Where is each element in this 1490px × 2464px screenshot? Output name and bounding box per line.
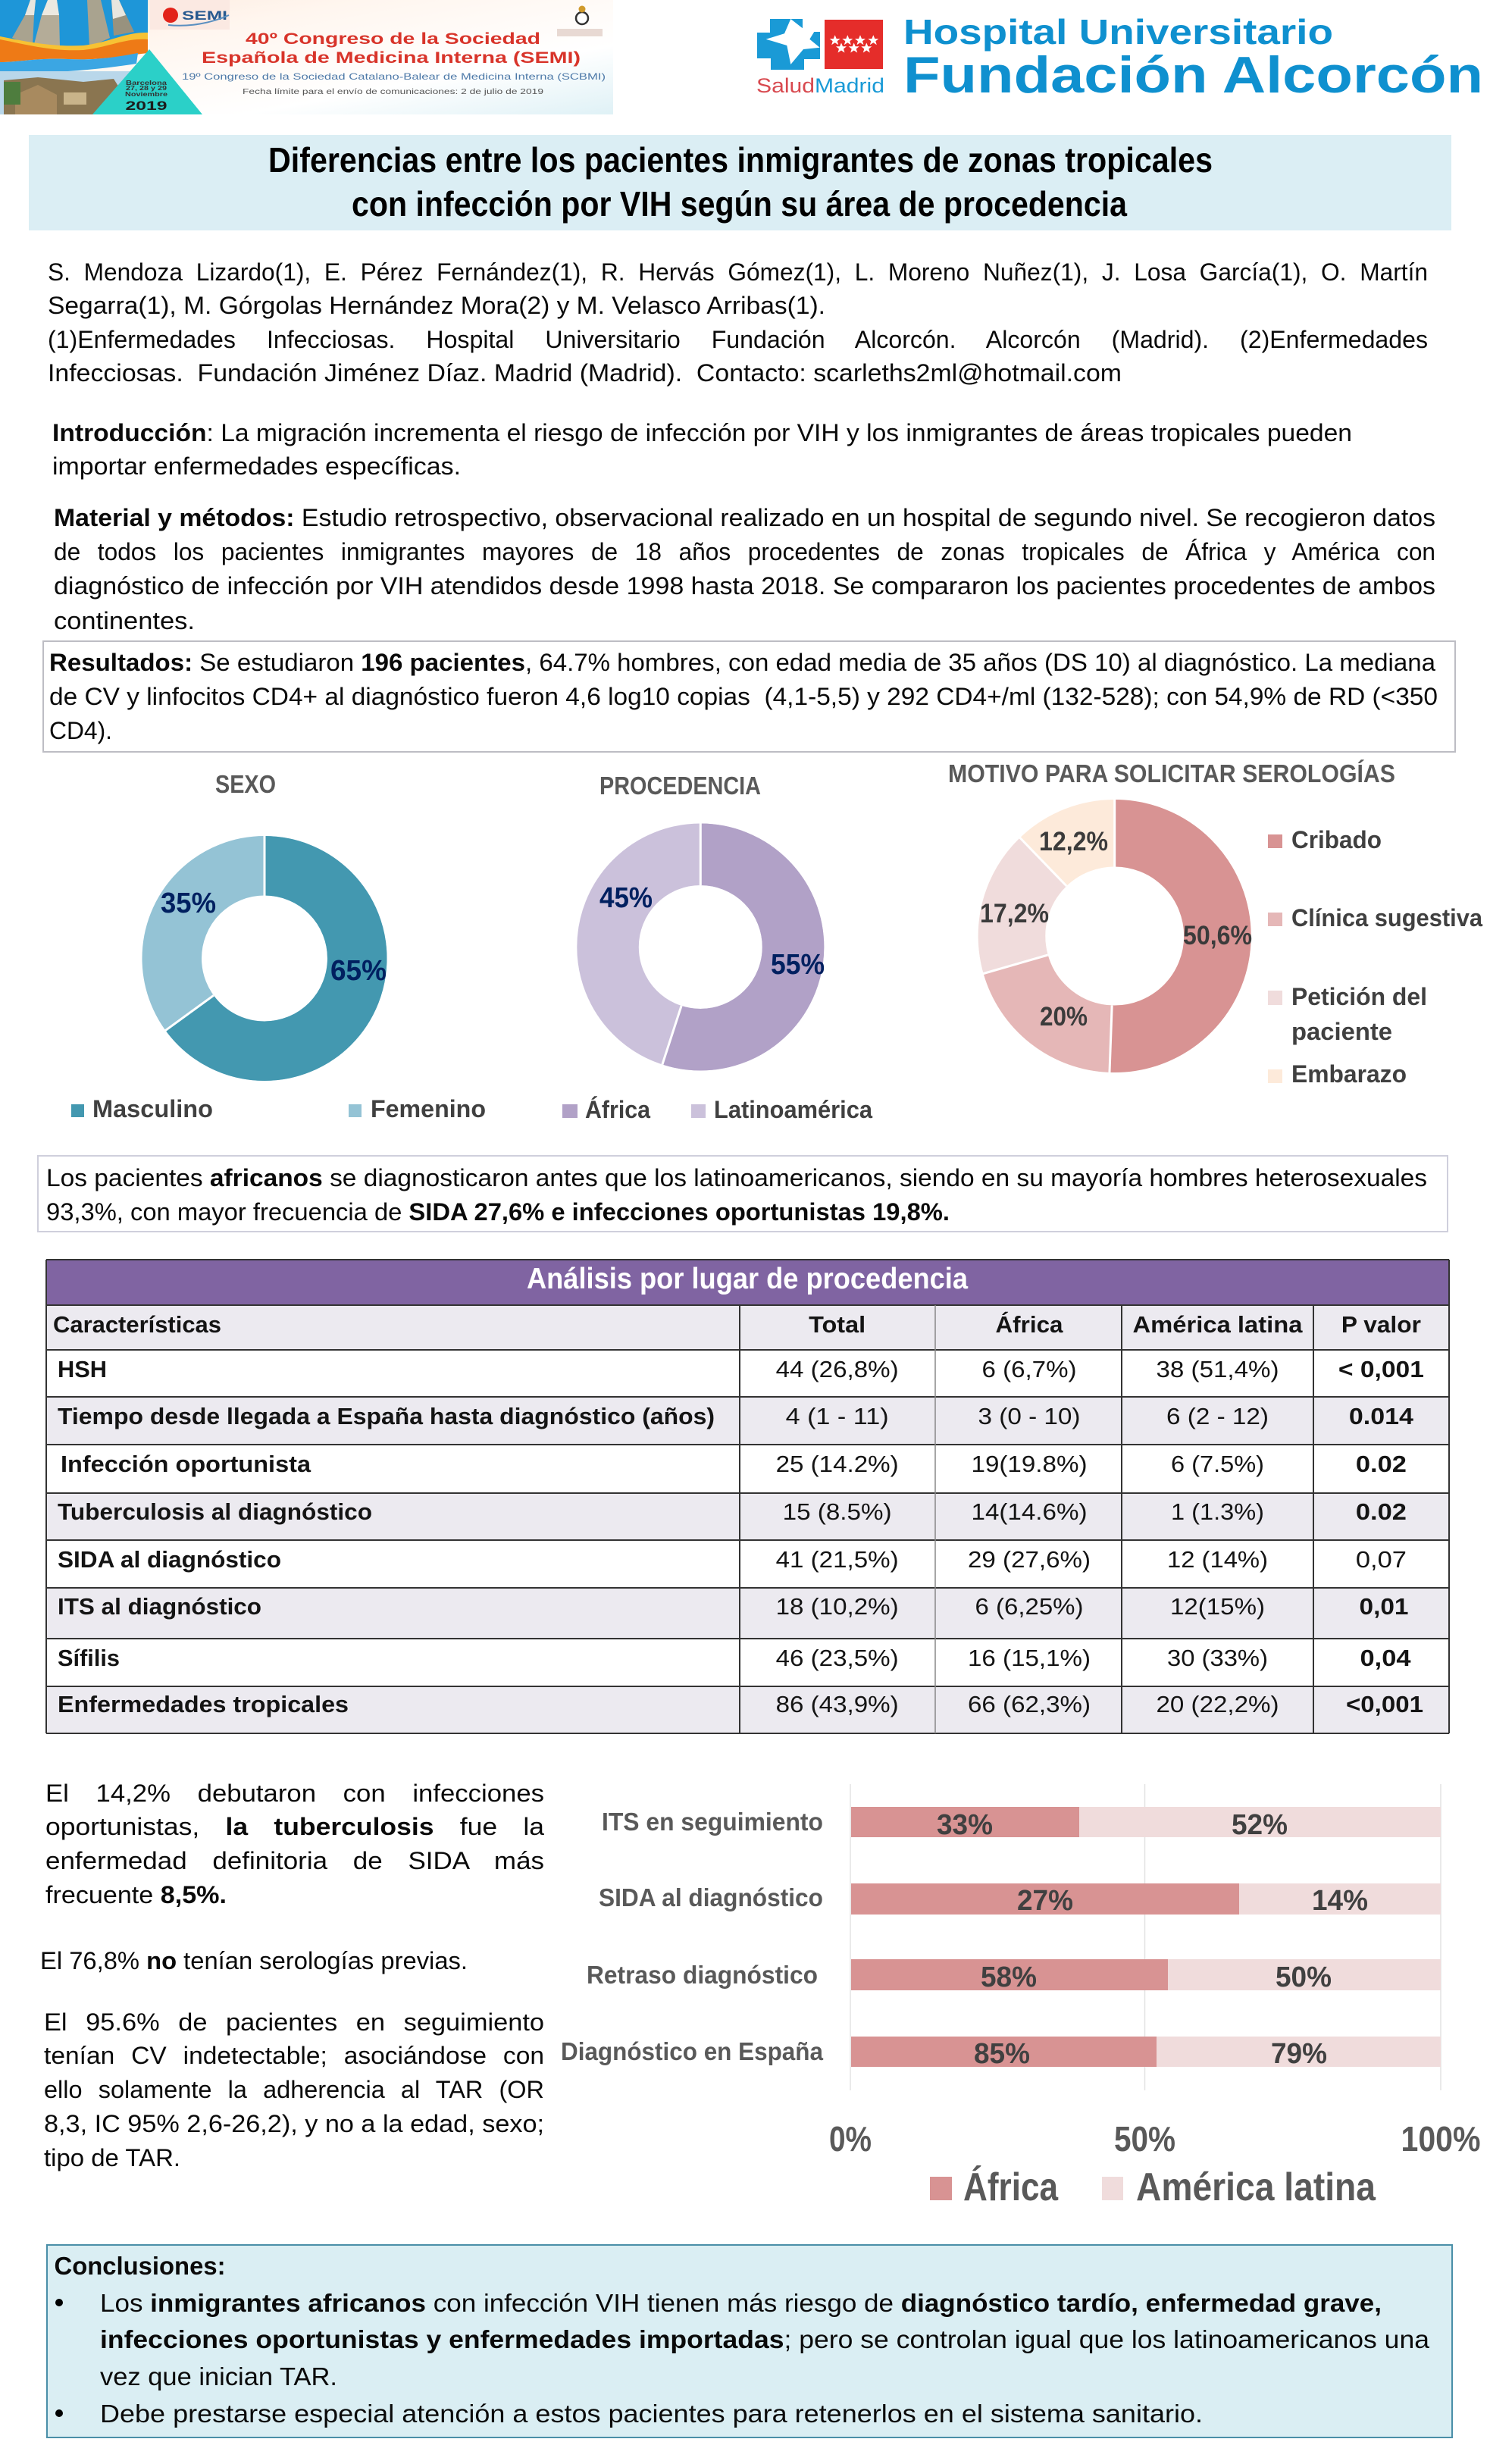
legend: procedencia [562,1096,872,1123]
table row: enfermedades tropicales: <0,001 [1346,1691,1423,1717]
table row: SIDA: 0,07 [1356,1546,1407,1573]
bar: Retraso diagnóstico: 58% [981,1961,1037,1993]
table row: infección oportunista: 25 (14.2%) [776,1451,899,1477]
title [29,135,1451,230]
donut: motivo: 12,2% [1039,827,1108,856]
title: Diferencias entre los pacientes inmigrantes de zonas tropicales [268,140,1213,180]
table row: tiempo: Tiempo desde llegada a España hasta diagnóstico (años) [58,1403,715,1429]
panel: african patients summary: Los pacientes africanos se diagnosticaron antes que los latinoamericanos, siendo en su mayoría hombres heterosexuales [46,1164,1427,1191]
donut: sexo: 35% [161,888,216,919]
table header: Análisis por lugar de procedencia [527,1263,968,1295]
bullet: second conclusion: Debe prestarse especial atención a estos pacientes para retenerlos en el sistema sanitario. [100,2400,1203,2428]
legend: procedencia: Latinoamérica [714,1096,872,1123]
table row: enfermedades tropicales: 86 (43,9%) [776,1691,899,1717]
table row: tiempo: 4 (1 - 11) [786,1403,889,1429]
bullet: first conclusion: Los inmigrantes africanos con infección VIH tienen más riesgo de diagnóstico tardío, enfermedad grave, [100,2289,1382,2317]
authors and affiliations: S. Mendoza Lizardo(1), E. Pérez Fernández(1), R. Hervás Gómez(1), L. Moreno Nuñez(1), J. Losa García(1), O. Martín [48,258,1428,286]
introduction: importar enfermedades específicas. [52,452,461,480]
table row: tuberculosis [58,1498,1407,1525]
table row: ITS: 12(15%) [1170,1593,1265,1620]
heading: SEXO: SEXO [215,770,276,798]
panel: results summary [43,641,1455,752]
bar: Diagnóstico en España: Diagnóstico en España [561,2037,824,2065]
introduction [52,419,1352,480]
authors and affiliations: Segarra(1), M. Górgolas Hernández Mora(2) y M. Velasco Arribas(1). [48,292,825,319]
donut: sexo [161,835,387,1051]
banner congress text: 40º Congreso de la Sociedad [246,30,540,48]
banner date: 2019 [126,99,167,113]
table row: HSH: < 0,001 [1338,1356,1424,1382]
table row: ITS: 6 (6,25%) [975,1593,1084,1620]
text block: opportunistic infections [45,1780,544,1908]
table row: tiempo: 3 (0 - 10) [978,1403,1081,1429]
scientific society logo [557,6,603,36]
bar: Retraso diagnóstico: 50% [1276,1961,1332,1993]
legend: procedencia: África [585,1096,650,1123]
panel: results summary: de CV y linfocitos CD4+ al diagnóstico fueron 4,6 log10 copias (4,1-5,5) y 292 CD4+/ml (132-528); con 54,9% de RD (<350 [49,683,1438,710]
chart: motivo donut [948,759,1482,1088]
table row: SIDA: 41 (21,5%) [776,1546,899,1573]
table row: sífilis: 30 (33%) [1167,1645,1268,1671]
heading: motivo: MOTIVO PARA SOLICITAR SEROLOGÍAS [948,759,1395,787]
banner congress text [182,30,606,96]
table row: infección oportunista: 19(19.8%) [972,1451,1087,1477]
table row: sífilis: 0,04 [1360,1645,1411,1671]
table row: infección oportunista: 0.02 [1356,1451,1407,1477]
heading: conclusions: Conclusiones: [55,2252,226,2280]
donut: sexo: 65% [330,955,387,987]
panel: conclusions [47,2245,1452,2437]
chart legend: África [963,2165,1059,2209]
table column headings: P valor [1341,1311,1421,1338]
text block: opportunistic infections: El 14,2% debutaron con infecciones [45,1780,544,1807]
chart axis labels [829,2119,1481,2159]
chart: procedencia donut [562,772,872,1123]
table row: ITS: 18 (10,2%) [776,1593,899,1620]
table column headings: América latina [1132,1311,1303,1338]
bar: SIDA al diagnóstico [599,1883,1441,1917]
text block: opportunistic infections: enfermedad definitoria de SIDA más [45,1847,544,1874]
table row: tiempo: 6 (2 - 12) [1166,1403,1269,1429]
bar: Diagnóstico en España: 85% [974,2038,1030,2070]
table column headings: África [996,1311,1063,1338]
logo wordmark Fundación Alcorcón: Fundación Alcorcón [903,46,1483,104]
banner congress text: Fecha límite para el envío de comunicaciones: 2 de julio de 2019 [243,88,544,96]
text block: undetectable viral load: ello solamente la adherencia al TAR (OR [44,2076,544,2103]
banner photo: Barcelona [0,0,202,114]
table row: sífilis: 46 (23,5%) [776,1645,899,1671]
table row: sífilis: Sífilis [58,1645,120,1671]
introduction: Introducción : La migración incrementa el riesgo de infección por VIH y los inmigrantes de áreas tropicales pueden [52,419,1352,446]
table row: HSH: 38 (51,4%) [1157,1356,1279,1382]
table column headings: Total [809,1311,866,1338]
chart axis labels: 100% [1401,2119,1481,2159]
table row: enfermedades tropicales: 66 (62,3%) [968,1691,1091,1717]
chart legend: América latina [1136,2165,1376,2209]
table row: HSH [58,1356,1424,1382]
icon: Madrid flag [825,20,883,69]
heading: PROCEDENCIA: PROCEDENCIA [599,772,761,800]
bullet: first conclusion: vez que inician TAR. [100,2362,337,2390]
text block: opportunistic infections: oportunistas, la tuberculosis fue la [45,1813,544,1840]
table row: HSH: HSH [58,1356,107,1382]
bar: SIDA al diagnóstico: 27% [1017,1885,1073,1917]
banner congress text: 19º Congreso de la Sociedad Catalano-Balear de Medicina Interna (SCBMI) [182,71,606,82]
bullet: first conclusion: infecciones oportunistas y enfermedades importadas ; pero se controlan igual que los latinoamericanos una [100,2325,1430,2353]
table row: tuberculosis: 1 (1.3%) [1171,1498,1264,1525]
table row: ITS [58,1593,1408,1620]
donut: procedencia: 45% [599,882,653,914]
table row: tiempo [58,1403,1414,1429]
banner date: Noviembre [125,90,167,98]
chart axis labels: 50% [1114,2119,1175,2159]
banner congress text: Española de Medicina Interna (SEMI) [202,49,581,67]
legend: sexo [71,1095,486,1122]
text block: undetectable viral load: El 95.6% de pacientes en seguimiento [44,2008,544,2036]
logo: Hospital Universitario Fundación Alcorcón [756,12,1483,104]
text block: undetectable viral load [44,2008,544,2171]
bullet: first conclusion [55,2289,1430,2390]
table row: HSH: 44 (26,8%) [776,1356,899,1382]
panel: results summary: CD4). [49,717,112,744]
table row: enfermedades tropicales [58,1691,1423,1717]
table row: tuberculosis: 14(14.6%) [972,1498,1087,1525]
bar: ITS en seguimiento: 52% [1232,1809,1288,1841]
legend: motivo: Embarazo [1291,1060,1407,1088]
material and methods: diagnóstico de infección por VIH atendidos desde 1998 hasta 2018. Se compararon los pacientes procedentes de ambos [54,572,1435,600]
panel: results summary: Resultados: Se estudiaron 196 pacientes, 64.7% hombres, con edad media de 35 años (DS 10) al diagnóstico. La mediana [49,649,1435,676]
table row: infección oportunista: Infección oportunista [61,1451,311,1477]
donut: motivo: 50,6% [1183,921,1252,950]
table row: tiempo: 0.014 [1349,1403,1414,1429]
material and methods: Material y métodos: Estudio retrospectivo, observacional realizado en un hospital de segundo nivel. Se recogieron datos [54,504,1435,531]
bar: Diagnóstico en España: 79% [1271,2038,1327,2070]
banner date: 27, 28 y 29 [126,84,167,92]
SEMI logo: SEMI [182,8,227,23]
text block: undetectable viral load: 8,3, IC 95% 2,6-26,2), y no a la edad, sexo; [44,2110,544,2137]
text block: opportunistic infections: frecuente 8,5%. [45,1881,227,1908]
text block: no previous serologies: El 76,8% no tenían serologías previas. [40,1947,468,1974]
table row: tuberculosis: Tuberculosis al diagnóstico [58,1498,372,1525]
bar: SIDA al diagnóstico: 14% [1312,1885,1368,1917]
bar: ITS en seguimiento: 33% [937,1809,993,1841]
legend: motivo: paciente [1291,1018,1392,1045]
donut: motivo: 17,2% [980,899,1049,928]
chart axis labels: 0% [829,2119,872,2159]
table: analysis by origin [46,1260,1449,1733]
bar: SIDA al diagnóstico: SIDA al diagnóstico [599,1883,823,1911]
bar: Retraso diagnóstico: Retraso diagnóstico [587,1961,818,1989]
logo wordmark hospital: Hospital Universitario [903,12,1333,52]
table row: ITS: ITS al diagnóstico [58,1593,261,1620]
table header [46,1260,1449,1305]
banner date [125,79,167,113]
banner: congress SEMI [0,0,613,114]
bar: ITS en seguimiento: ITS en seguimiento [602,1808,823,1836]
material and methods: continentes. [54,607,195,634]
panel: african patients summary [38,1156,1448,1232]
chart legend [930,2165,1376,2209]
legend: motivo: Petición del [1291,983,1427,1010]
table row: enfermedades tropicales: Enfermedades tropicales [58,1691,349,1717]
table column headings [53,1311,1421,1338]
legend: motivo [1268,826,1482,1088]
table row: enfermedades tropicales: 20 (22,2%) [1157,1691,1279,1717]
legend: sexo: Masculino [92,1095,213,1122]
chart: sexo donut [71,770,486,1122]
table row: SIDA: SIDA al diagnóstico [58,1546,281,1573]
table row: SIDA [58,1546,1407,1573]
table row: tuberculosis: 15 (8.5%) [783,1498,892,1525]
bar: Diagnóstico en España [561,2037,1441,2070]
donut: procedencia [599,823,825,1064]
donut: procedencia: 55% [771,949,825,981]
table row: infección oportunista: 6 (7.5%) [1171,1451,1264,1477]
logo wordmark Salud Madrid: Salud Madrid [756,74,884,97]
donut: motivo: 20% [1040,1002,1088,1032]
SEMI logo [150,0,230,30]
table row: sífilis: 16 (15,1%) [968,1645,1091,1671]
table row: sífilis [58,1645,1411,1671]
donut: motivo [980,798,1252,1074]
text block: undetectable viral load: tenían CV indetectable; asociándose con [44,2042,544,2069]
table row: infección oportunista [61,1451,1407,1477]
authors and affiliations: Infecciosas. Fundación Jiménez Díaz. Madrid (Madrid). Contacto: scarleths2ml@hotmail.com [48,359,1122,387]
legend: motivo: Clínica sugestiva [1291,904,1482,931]
bar: Retraso diagnóstico [587,1959,1441,1993]
material and methods [54,504,1435,634]
text block: undetectable viral load: tipo de TAR. [44,2144,180,2171]
icon: blue cross [757,19,820,70]
title: con infección por VIH según su área de procedencia [352,184,1127,224]
authors and affiliations [48,258,1428,387]
table row: ITS: 0,01 [1360,1593,1408,1620]
legend: motivo: Cribado [1291,826,1382,853]
bar: ITS en seguimiento [602,1807,1441,1841]
legend: sexo: Femenino [371,1095,486,1122]
material and methods: de todos los pacientes inmigrantes mayores de 18 años procedentes de zonas tropicales de África y América con [54,538,1435,565]
table row: SIDA: 29 (27,6%) [968,1546,1091,1573]
panel: african patients summary: 93,3%, con mayor frecuencia de SIDA 27,6% e infecciones oportunistas 19,8%. [46,1198,950,1226]
table row: tuberculosis: 0.02 [1356,1498,1407,1525]
table column headings: Características [53,1311,221,1338]
table row: HSH: 6 (6,7%) [982,1356,1076,1382]
banner date: Barcelona [126,79,167,86]
chart: stacked bars África vs América latina [561,1784,1481,2209]
authors and affiliations: (1)Enfermedades Infecciosas. Hospital Universitario Fundación Alcorcón. Alcorcón (Madrid). (2)Enfermedades [48,326,1428,353]
table row: SIDA: 12 (14%) [1167,1546,1268,1573]
